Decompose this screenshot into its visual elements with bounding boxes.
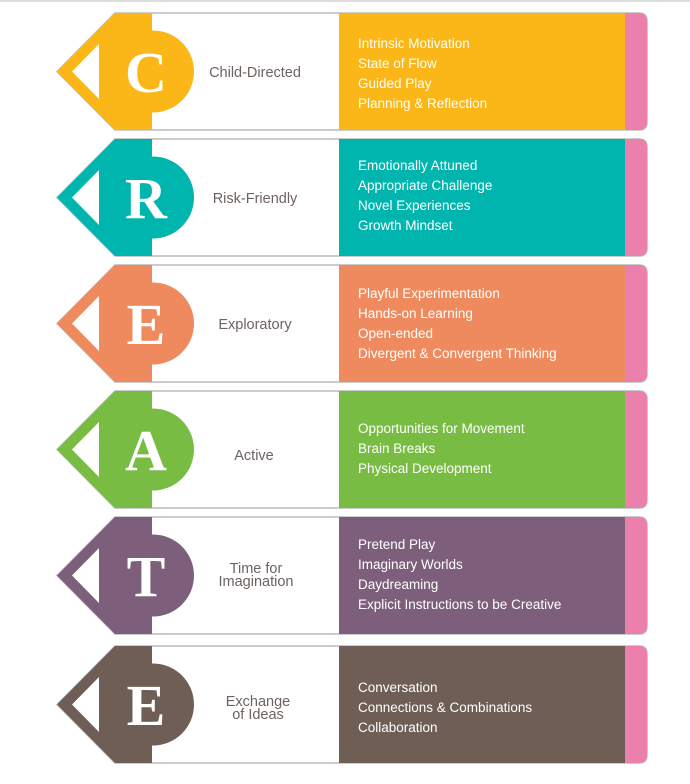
row: E Exploratory: Divergent & Convergent Thinking bbox=[358, 346, 557, 361]
row: C Child-Directed: Child-Directed bbox=[209, 65, 301, 81]
row: C Child-Directed: Planning & Reflection bbox=[358, 96, 487, 111]
row: R Risk-Friendly: Risk-Friendly bbox=[213, 191, 298, 207]
row: T Time for Imagination: Explicit Instructions to be Creative bbox=[358, 597, 561, 612]
row: A Active: Opportunities for Movement bbox=[358, 421, 525, 436]
row: E Exchange of Ideas bbox=[57, 646, 647, 763]
row: E Exchange of Ideas: Exchange bbox=[226, 694, 290, 710]
row: E Exploratory bbox=[57, 265, 647, 382]
row: R Risk-Friendly: Novel Experiences bbox=[358, 198, 471, 213]
row: C Child-Directed: C bbox=[125, 40, 167, 105]
row: T Time for Imagination bbox=[57, 517, 647, 634]
row: E Exchange of Ideas: Conversation bbox=[358, 680, 438, 695]
row: R Risk-Friendly: Growth Mindset bbox=[358, 218, 453, 233]
row: A Active: Physical Development bbox=[358, 461, 492, 476]
row: T Time for Imagination: Daydreaming bbox=[358, 577, 438, 592]
row: C Child-Directed: Guided Play bbox=[358, 76, 432, 91]
row: T Time for Imagination: Pretend Play bbox=[358, 537, 436, 552]
row: E Exchange of Ideas: E bbox=[127, 673, 165, 738]
row: E Exploratory: Open-ended bbox=[358, 326, 433, 341]
row: A Active bbox=[57, 391, 647, 508]
row: T Time for Imagination: Imagination bbox=[219, 574, 293, 590]
row: R Risk-Friendly: Emotionally Attuned bbox=[358, 158, 477, 173]
row: A Active: Active bbox=[234, 448, 274, 464]
row: E Exploratory: E bbox=[127, 292, 165, 357]
row: E Exploratory: Exploratory bbox=[218, 317, 292, 333]
row: R Risk-Friendly: Appropriate Challenge bbox=[358, 178, 492, 193]
row: C Child-Directed: Intrinsic Motivation bbox=[358, 36, 470, 51]
row: T Time for Imagination: T bbox=[127, 544, 165, 609]
row: C Child-Directed bbox=[57, 13, 647, 130]
row: E Exchange of Ideas: of Ideas bbox=[232, 707, 284, 723]
row: E Exchange of Ideas: Collaboration bbox=[358, 720, 438, 735]
row: E Exchange of Ideas: Connections & Combinations bbox=[358, 700, 532, 715]
row: R Risk-Friendly: R bbox=[125, 166, 168, 231]
row: E Exploratory: Hands-on Learning bbox=[358, 306, 473, 321]
row: A Active: Brain Breaks bbox=[358, 441, 436, 456]
row: C Child-Directed: State of Flow bbox=[358, 56, 437, 71]
row: T Time for Imagination: Time for bbox=[230, 561, 282, 577]
row: T Time for Imagination: Imaginary Worlds bbox=[358, 557, 463, 572]
row: R Risk-Friendly bbox=[57, 139, 647, 256]
row: E Exploratory: Playful Experimentation bbox=[358, 286, 500, 301]
row: A Active: A bbox=[125, 418, 167, 483]
